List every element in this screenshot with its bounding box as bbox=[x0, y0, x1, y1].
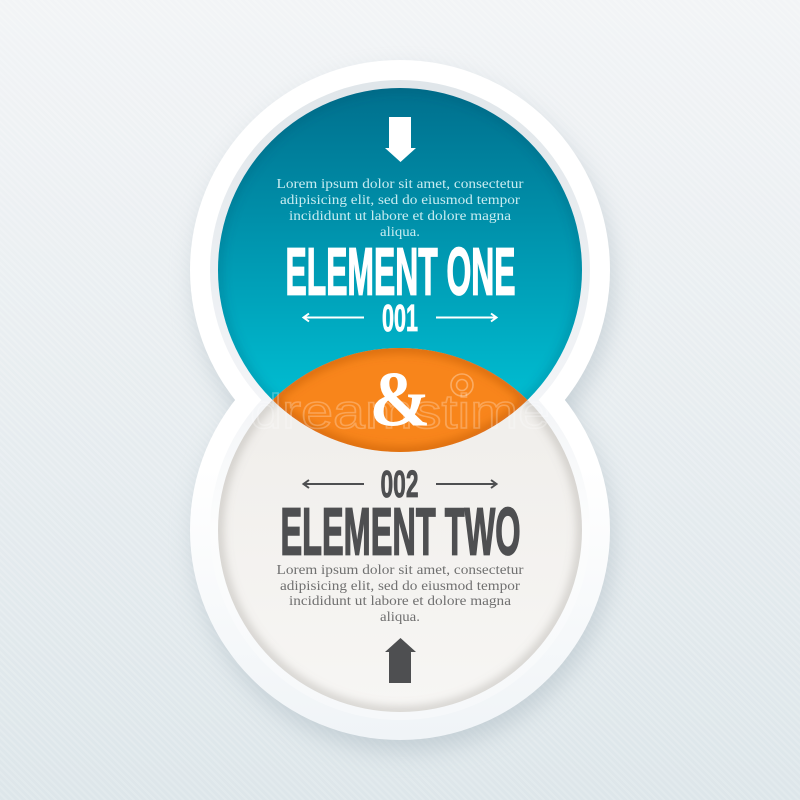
panel: element two circle bbox=[218, 348, 582, 712]
icon: up arrow bbox=[385, 638, 416, 683]
text: ELEMENT ONE bbox=[286, 234, 516, 310]
text block: element one description: aliqua. bbox=[380, 224, 420, 239]
text block: element two description: Lorem ipsum dolor sit amet, consectetur bbox=[276, 562, 524, 577]
number: 001 with arrows: 001 bbox=[382, 298, 418, 340]
text block: element one description: incididunt ut labore et dolore magna bbox=[289, 208, 511, 223]
text block: element two description: aliqua. bbox=[380, 609, 420, 624]
text block: element two description: incididunt ut labore et dolore magna bbox=[289, 593, 511, 608]
text: ELEMENT TWO bbox=[280, 494, 520, 570]
figure-eight frame bbox=[190, 60, 614, 752]
text block: element two description: adipisicing elit, sed do eiusmod tempor bbox=[280, 578, 521, 593]
text block: element one description: Lorem ipsum dolor sit amet, consectetur bbox=[276, 176, 524, 191]
text block: element one description bbox=[276, 176, 524, 239]
number: 002 with arrows: 002 bbox=[380, 464, 418, 506]
text block: element two description bbox=[276, 562, 524, 624]
panel: element one circle bbox=[218, 88, 582, 400]
panel: orange overlap bbox=[273, 348, 527, 452]
ampersand: & bbox=[370, 355, 430, 442]
text block: element one description: adipisicing elit, sed do eiusmod tempor bbox=[280, 192, 521, 207]
watermark: dreamstime bbox=[250, 386, 550, 439]
watermark bbox=[250, 374, 550, 439]
number: 002 with arrows bbox=[304, 464, 496, 506]
icon: down arrow bbox=[385, 117, 416, 162]
number: 001 with arrows bbox=[304, 298, 496, 340]
